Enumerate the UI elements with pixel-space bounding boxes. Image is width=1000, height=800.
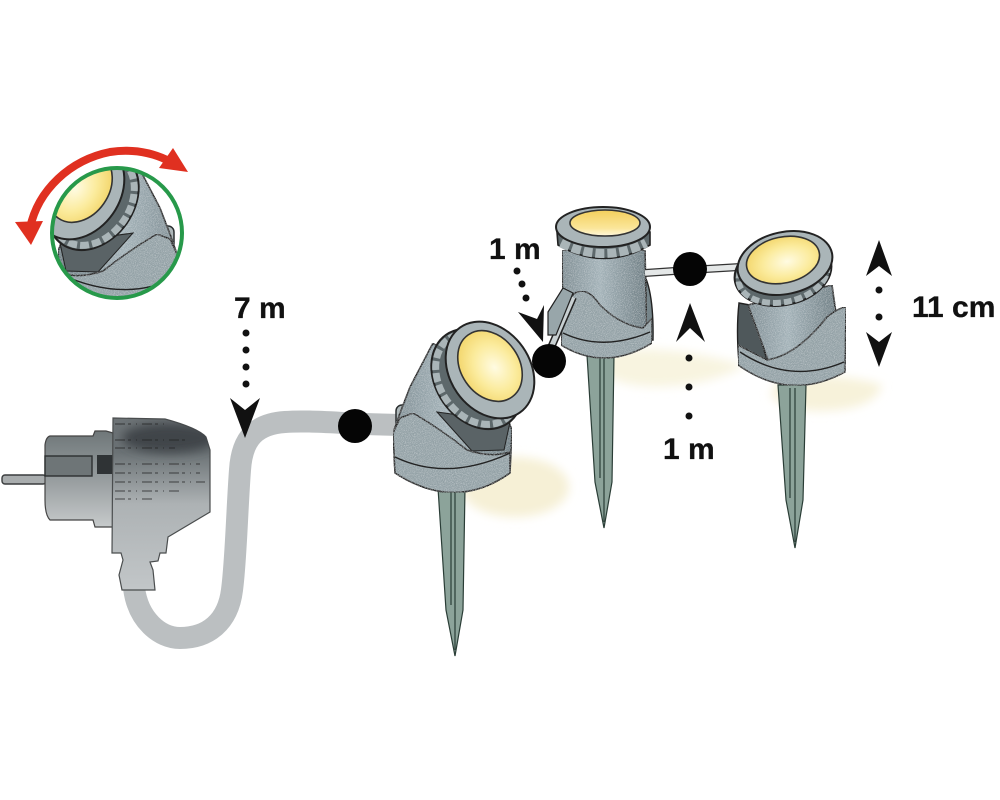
- dotted arrow: [514, 268, 530, 302]
- back strap: [640, 268, 653, 340]
- bracket strap and cable: [550, 297, 573, 350]
- inset spotlight close-up: [54, 170, 177, 296]
- ground shadows: [461, 349, 882, 517]
- infographic: [1, 146, 994, 656]
- plug body: [112, 418, 210, 590]
- spike: [438, 488, 465, 656]
- icon: spotlight 1: [393, 304, 553, 656]
- link cable between lights: [645, 267, 740, 273]
- cap: [732, 223, 838, 303]
- inset background: [52, 168, 182, 298]
- notched ring: [412, 311, 542, 447]
- inset circle: [52, 168, 182, 298]
- power cable: [134, 421, 400, 638]
- housing: [748, 285, 837, 360]
- plug pin: [2, 475, 46, 484]
- spotlight head: [393, 304, 553, 492]
- plug collar: [45, 431, 113, 527]
- base line: [563, 332, 650, 342]
- dimension: 11 cm: 11 cm: [912, 291, 995, 324]
- icon: spotlight 3: [728, 223, 846, 548]
- dimension: 7 m: [230, 292, 286, 438]
- cap: [427, 304, 553, 436]
- front saddle: [393, 413, 510, 492]
- base line: [395, 453, 510, 469]
- double arrow: [866, 240, 892, 276]
- bracket wing: [548, 288, 573, 335]
- housing: [562, 250, 647, 340]
- base line: [740, 352, 844, 371]
- dimension: 7 m: 7 m: [234, 292, 286, 325]
- front saddle: [738, 307, 846, 385]
- cap: [556, 207, 650, 247]
- lens: [444, 318, 536, 414]
- plug dark top shading: [122, 423, 218, 453]
- lens: [742, 230, 824, 290]
- lens: [570, 210, 640, 236]
- recess: [437, 412, 510, 451]
- rotation arrow: [15, 148, 188, 245]
- dimension: 11 cm: [866, 240, 995, 367]
- icon: spotlight 2: [548, 207, 653, 528]
- plug window: [45, 456, 92, 476]
- spike: [587, 355, 614, 528]
- back strap: [738, 303, 768, 363]
- dotted arrow: [242, 330, 250, 388]
- plug grip ridges: [115, 424, 205, 499]
- notched ring: [728, 230, 838, 314]
- plug contact block: [97, 455, 114, 474]
- spike: [778, 385, 806, 548]
- icon: rotation inset: [15, 146, 188, 300]
- dotted arrow: [676, 303, 705, 342]
- cable clip: [396, 405, 414, 429]
- dimension: 1 m lower: 1 m: [663, 433, 715, 466]
- dimension: 1 m upper: [489, 233, 544, 342]
- icon: connector dots: [338, 252, 707, 443]
- notched ring: [557, 232, 650, 258]
- dimension: 1 m lower: [663, 303, 715, 466]
- front saddle: [561, 291, 652, 358]
- icon: plug and cable: [2, 418, 400, 638]
- housing: [393, 343, 512, 492]
- dimension: 1 m upper: 1 m: [489, 233, 541, 266]
